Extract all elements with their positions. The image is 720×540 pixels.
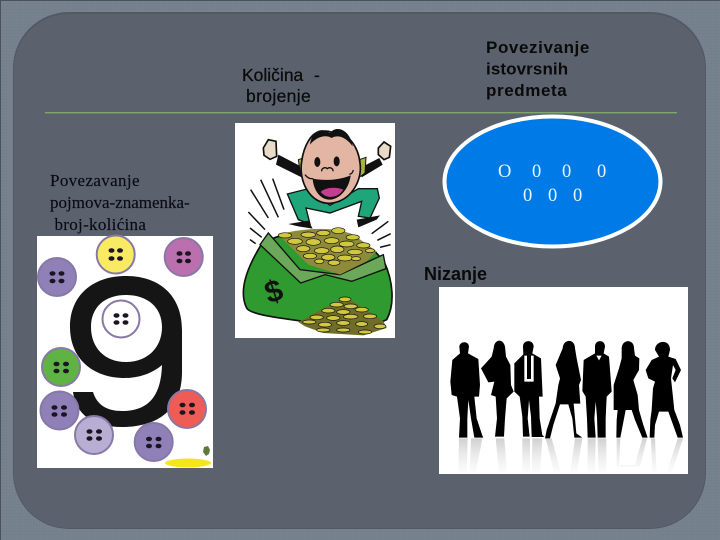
coins in bag xyxy=(278,228,377,275)
zeros row two: 0 xyxy=(523,186,532,206)
heading: Količina brojenje: brojenje xyxy=(246,86,311,106)
buttons xyxy=(38,236,206,461)
dollar sign: $ xyxy=(260,273,287,310)
head xyxy=(301,129,360,203)
heading: Količina brojenje: - xyxy=(314,65,320,85)
heading: Povezavanje pojmova: broj-kolićina xyxy=(54,215,146,234)
person 2: woman xyxy=(481,341,514,437)
button holes xyxy=(50,248,195,448)
heading: Povezivanje istovrsnih predmeta: Povezivanje xyxy=(486,38,590,57)
feet xyxy=(288,215,380,229)
arms xyxy=(276,155,383,177)
heading: Povezivanje istovrsnih predmeta: istovrsnih xyxy=(486,60,568,78)
collar xyxy=(298,157,366,178)
heading: Količina brojenje xyxy=(242,65,320,106)
green divider line xyxy=(45,112,677,113)
blue oval with zeros: 0 xyxy=(548,186,557,206)
heading: Povezavanje pojmova: Povezavanje xyxy=(50,171,140,190)
blue oval with zeros xyxy=(444,116,660,246)
reflections xyxy=(458,438,683,473)
tie and shirt xyxy=(524,356,534,382)
person 6: woman xyxy=(614,341,648,438)
money bag xyxy=(243,233,392,330)
heading: Povezivanje istovrsnih predmeta: predmeta xyxy=(486,81,567,100)
picture: cartoon man on money bag xyxy=(235,123,395,338)
legs xyxy=(287,189,379,224)
person 3: man with tie xyxy=(514,341,544,437)
motion lines xyxy=(248,179,391,247)
picture: row of silhouettes xyxy=(439,287,688,474)
person 5: man xyxy=(582,341,612,438)
coin pile xyxy=(298,297,387,335)
heading: Nizanje: Nizanje xyxy=(424,264,487,284)
zeros row one: O xyxy=(498,162,511,182)
person 7: woman hands on hips xyxy=(646,342,683,438)
bag flap xyxy=(260,233,386,283)
heading: Količina brojenje: Količina xyxy=(242,65,304,85)
logo badge xyxy=(165,446,211,468)
numeral nine xyxy=(70,276,182,427)
picture: number nine with buttons xyxy=(37,236,213,468)
heading: Povezavanje pojmova xyxy=(50,171,190,234)
person 1: man xyxy=(450,342,483,438)
blue oval with zeros: 0 xyxy=(532,162,541,182)
person 4: woman in dress xyxy=(545,341,582,438)
heading: Povezivanje istovrsnih predmeta xyxy=(486,38,590,100)
heading: Povezavanje pojmova: pojmova-znamenka- xyxy=(50,193,190,212)
blue oval with zeros: 0 xyxy=(597,162,606,182)
blue oval with zeros: 0 xyxy=(573,186,582,206)
fists xyxy=(263,140,277,159)
blue oval with zeros: 0 xyxy=(562,162,571,182)
